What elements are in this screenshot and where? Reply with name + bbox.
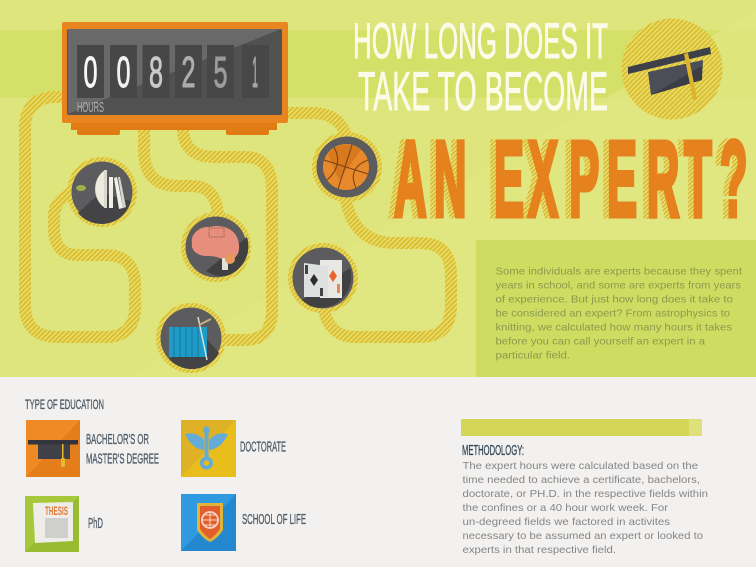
- legend: phd: THESIS: [45, 504, 68, 518]
- title: an expert: AN EXPERT?: [388, 118, 742, 239]
- icon: basketball circle: [312, 132, 382, 202]
- legend: phd: PhD: [88, 515, 103, 532]
- winding hatched paths: [25, 97, 451, 340]
- digits: 0: [116, 48, 130, 97]
- legend: phd: [25, 496, 103, 552]
- text block: methodology: un-degreed fields we factored in activites: [462, 516, 670, 528]
- digits: 2: [182, 48, 196, 97]
- background: green header area: [0, 0, 756, 377]
- text block: methodology: time needed to achieve a certificate, bachelors,: [462, 474, 700, 486]
- text block: intro: [496, 266, 742, 362]
- title: how long does it take to become: [353, 13, 608, 122]
- text block: methodology: The expert hours were calculated based on the: [462, 460, 698, 472]
- legend: doctorate: [181, 420, 286, 477]
- icon: knitting circle: [156, 303, 226, 373]
- digits: 0: [84, 48, 98, 97]
- legend: school of life: [181, 494, 306, 551]
- heading: methodology: METHODOLOGY:: [462, 442, 524, 459]
- text block: intro: Some individuals are experts because they spent: [496, 266, 742, 278]
- text block: methodology: experts in that respective field.: [462, 544, 616, 556]
- digits: 8: [149, 48, 163, 97]
- legend: bachelor's or master's degree: [26, 420, 159, 477]
- heading: type of education: TYPE OF EDUCATION: [25, 396, 104, 412]
- timer casing: [62, 22, 288, 123]
- text block: intro: knitting, we calculated how many hours it takes: [496, 322, 732, 334]
- panel: intro background: [476, 240, 756, 377]
- icon: playing cards circle: [288, 243, 358, 313]
- text block: intro: before you can call yourself an expert in a: [496, 336, 705, 348]
- text block: intro: of experience. But just how long does it take to: [496, 294, 733, 306]
- text block: methodology: doctorate, or PH.D. in the respective fields within: [462, 488, 708, 500]
- icon: stopwatch-like timer counter: 1: [252, 48, 258, 97]
- panel: legend: DOCTORATE: [240, 438, 286, 456]
- legend: bachelor's or master's degree: MASTER'S DEGREE: [86, 450, 159, 468]
- legend: bachelor's or master's degree: BACHELOR'S OR: [86, 431, 149, 448]
- legend: school of life: SCHOOL OF LIFE: [242, 511, 306, 528]
- text block: methodology: necessary to be assumed an expert or looked to: [462, 530, 703, 542]
- digit tiles: [77, 45, 269, 98]
- timer feet: [71, 122, 277, 135]
- icon: graduation cap in hatched circle: [622, 18, 722, 120]
- timer screen: [67, 29, 282, 115]
- text block: methodology: [462, 460, 708, 556]
- text block: intro: be considered an expert? From astrophysics to: [496, 308, 730, 320]
- panel: legend: [25, 396, 306, 552]
- digits: [84, 48, 258, 97]
- panel: methodology: [461, 419, 708, 556]
- icon: stopwatch-like timer counter: [62, 22, 288, 135]
- text block: methodology: the confines or a 40 hour work week. For: [462, 502, 669, 514]
- icon: stopwatch-like timer counter: HOURS: [77, 99, 104, 116]
- digits: 5: [214, 48, 228, 97]
- title: an expert: AN EXPERT?: [394, 118, 748, 239]
- icon: apple and books circle: [67, 157, 137, 227]
- icon: brain circle: [181, 212, 251, 282]
- text block: intro: particular field.: [496, 350, 570, 362]
- text block: intro: years in school, and some are experts from years: [496, 280, 741, 292]
